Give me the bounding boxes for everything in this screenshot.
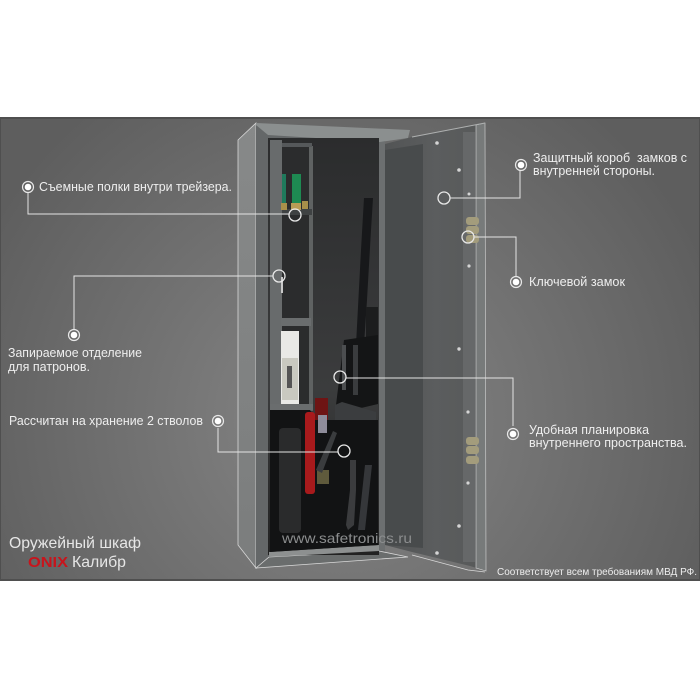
callout: convenient layout: Удобная планировка [529,422,650,437]
cabinet top face [256,123,410,142]
callout: convenient layout: внутреннего пространства. [529,435,687,450]
product title [9,535,141,571]
lower shelf [270,404,313,410]
callout: removable shelves: Съемные полки внутри трейзера. [39,179,232,194]
magazine and stock [346,460,356,530]
cabinet side wall [238,123,256,568]
shotgun shells [281,174,308,210]
cabinet bottom edge [256,551,408,568]
cabinet interior [268,138,379,555]
tan part [317,470,329,484]
lower rifle mass [270,410,378,552]
rear rail block [366,307,378,347]
callout: two barrels: Рассчитан на хранение 2 стволов [9,413,203,428]
product title: Калибр [72,554,126,571]
callout: protective box: внутренней стороны. [533,163,655,178]
lower locking bolts [466,437,479,464]
magazine left [279,428,301,533]
door recessed panel [385,144,423,548]
callout: convenient layout [334,371,687,450]
product title: Оружейный шкаф [9,535,141,552]
middle shelf [281,318,311,326]
rifles [270,198,378,552]
door inner panel [385,123,486,571]
callout: two barrels [9,413,350,457]
callout: lockable compartment [8,270,285,374]
key [281,277,283,293]
cabinet floor [269,545,379,557]
callout: protective box [438,150,687,204]
rifle grip block [335,402,376,425]
safe cabinet [238,123,486,572]
diagonal handguard [316,431,337,473]
door right edge [476,123,486,571]
rifle rail dots [342,345,346,390]
watermark: www.safetronics.ru [281,530,412,546]
door locking strip [463,132,475,562]
callout: protective box: Защитный короб замков с [533,150,687,165]
upper rifle body [336,335,378,412]
upper locking bolts [466,217,479,243]
red pouch top [315,398,328,420]
background panel [0,118,700,580]
product title: ONIX [28,554,68,571]
callout: removable shelves [22,179,301,221]
compartment back [281,145,311,406]
white canister [281,331,299,404]
ammo compartment [270,140,313,411]
compartment door edge [270,140,282,410]
door hinge edge [379,142,385,550]
upper rifle barrel [356,198,373,345]
callout: lockable compartment: для патронов. [8,359,90,374]
door bottom edge [412,555,485,572]
red cleaning rod [305,412,315,494]
callout: lockable compartment: Запираемое отделение [8,345,142,360]
callout: key lock: Ключевой замок [529,274,625,289]
cabinet front frame [256,125,385,568]
upper shelf [282,209,312,215]
blue and orange label [318,415,327,433]
compartment right wall [309,146,313,411]
door screws [435,141,471,555]
door top edge [412,123,485,137]
rifle side rail [353,345,358,395]
compartment top [282,143,312,147]
callout: key lock [462,231,625,289]
open door [379,123,486,572]
